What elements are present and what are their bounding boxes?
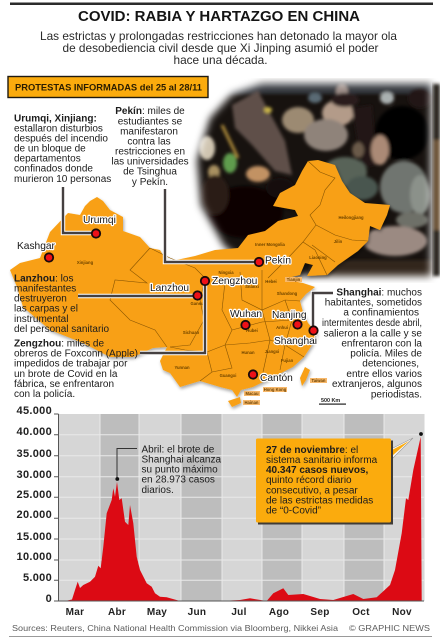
map: Hainan (228, 397, 241, 407)
intro text: hace una década. (174, 53, 268, 67)
text: Zengzhou: un brote de Covid en la (14, 369, 118, 380)
chart: y axis labels: 20.000 (17, 509, 52, 521)
text: Shanghai: policía. Miles de (350, 348, 422, 360)
chart: y axis labels: 5.000 (23, 572, 52, 584)
map: province borders (110, 161, 368, 381)
map of China (10, 160, 390, 407)
chart: month labels: Jun (188, 607, 206, 618)
intro text (40, 29, 397, 67)
text: Urumqi: murieron 10 personas (14, 174, 111, 185)
text: Shanghai: enfrentaron con la (341, 338, 422, 350)
map: province names: Hunan (241, 350, 255, 355)
text: Pekín: restricciones en (115, 146, 185, 158)
scale bar (319, 398, 346, 405)
photo right strip (433, 84, 440, 276)
sources line: Sources: Reuters, China National Health Commission via Bloomberg, Nikkei Asia (12, 623, 338, 633)
city markers and names: Lanzhou (150, 283, 189, 294)
chart: month labels: Oct (352, 607, 370, 618)
map: province names: Jilin (334, 239, 343, 244)
text: Shanghai: intermitentes desde abril, (322, 318, 422, 329)
text: Pekín: Pekín: miles de (115, 106, 185, 117)
text: Shanghai: extranjeros, algunos (332, 379, 422, 390)
map: province names: Ningxia (218, 270, 234, 275)
map: province names: Xinjiang (77, 260, 94, 265)
city markers and names: Shanghai (274, 336, 317, 347)
intro text: de desobediencia civil desde que Xi Jinping asumió el poder (62, 41, 379, 55)
chart: y axis labels: 15.000 (17, 531, 52, 543)
city markers and names: Pekín (265, 256, 291, 266)
chart: y axis labels: 30.000 (17, 469, 52, 481)
callout: 27 November: 27 de noviembre: el (266, 445, 358, 456)
map: province names: Heilongjiang (338, 215, 364, 220)
credit: © GRAPHIC NEWS (349, 623, 430, 633)
chart: baseline and axis (54, 414, 424, 601)
text: Shanghai: a confinamientos (343, 308, 419, 318)
chart: daily cases (17, 405, 424, 618)
text: Pekín: manifestaron (120, 126, 178, 138)
text: Lanzhou: instrumental (14, 314, 68, 325)
map: province names: Yunnan (174, 365, 190, 370)
intro text: Las estrictas y prolongadas restricciones han detonado la mayor ola (40, 29, 397, 43)
dot: November peak (419, 432, 423, 436)
map: province names: Hebei (265, 279, 277, 284)
chart: month labels: Abr (108, 607, 126, 618)
map: province names (77, 215, 364, 378)
chart: month labels: Sep (310, 607, 330, 618)
map: province names: Shandong (277, 291, 298, 296)
text: Pekín (111, 106, 189, 188)
text: Zengzhou: con la policía. (14, 389, 75, 400)
label tags: Tianjin, Taiwan, Macau, Hong Kong, Hainan: Hong Kong (264, 387, 287, 392)
annotation: April peak (115, 444, 221, 496)
text: Urumqi: estallaron disturbios (14, 124, 103, 134)
chart: month labels: Jul (231, 607, 247, 618)
text: Lanzhou: del personal sanitario (14, 324, 109, 335)
chart: y axis labels: 35.000 (17, 448, 52, 460)
text: Zengzhou: obreros de Foxconn (Apple) (14, 348, 138, 360)
text: Zengzhou (14, 338, 138, 400)
annotation: April peak: Abril: el brote de (142, 444, 215, 456)
text: Pekín: de Tsinghua (123, 166, 177, 178)
city markers and names (17, 215, 318, 384)
label tags: Tianjin, Taiwan, Macau, Hong Kong, Hainan: Taiwan (312, 378, 326, 383)
text: Shanghai (322, 288, 422, 400)
text: Shanghai: entre ellos varios (346, 369, 422, 380)
callout: 27 November: 40.347 casos nuevos, (266, 465, 369, 476)
scale bar: 500 Km (321, 398, 340, 404)
text: Urumqi: confinados donde (14, 164, 93, 174)
top rule (10, 2, 433, 5)
city markers and names: Zengzhou (212, 276, 257, 287)
chart: month bands (58, 414, 424, 601)
text: Zengzhou: impedidos de trabajar por (14, 358, 128, 370)
text: Lanzhou: manifestantes (14, 284, 76, 294)
chart: y axis labels: 25.000 (17, 489, 52, 501)
map: Taiwan (300, 367, 310, 386)
text: Urumqi: Urumqi, Xinjiang: (14, 114, 97, 124)
chart: y axis labels: 45.000 (17, 405, 52, 417)
chart: y axis labels: 10.000 (17, 551, 52, 563)
text: Shanghai: periodistas. (371, 390, 422, 400)
annotation: April peak: su punto máximo (142, 464, 218, 476)
label tags: Tianjin, Taiwan, Macau, Hong Kong, Hainan: Tianjin (287, 277, 301, 282)
text: Pekín: estudiantes se (118, 116, 183, 128)
label tags: Tianjin, Taiwan, Macau, Hong Kong, Hainan: Macau (245, 391, 259, 396)
text: Shanghai: salieron a la calle y se (324, 328, 422, 340)
text: Pekín: contra las (127, 136, 171, 148)
text: Zengzhou: fábrica, se enfrentaron (14, 379, 114, 390)
heading: protests banner: PROTESTAS INFORMADAS del 25 al 28/11 (15, 82, 202, 92)
text: Shanghai: Shanghai: muchos (336, 288, 422, 298)
callout: 27 November: consecutivo, a pesar (266, 486, 358, 496)
label tags: Tianjin, Taiwan, Macau, Hong Kong, Hainan (243, 277, 327, 405)
callout: 27 November: de las estrictas medidas (266, 496, 373, 506)
chart: month labels: May (147, 607, 167, 618)
text: Shanghai: detenciones, (362, 358, 419, 370)
text: Urumqi: de un bloque de (14, 144, 86, 154)
city markers and names: Wuhan (230, 309, 262, 320)
city markers and names: Kashgar (17, 241, 56, 252)
bottom rule (9, 636, 432, 637)
annotation: April peak: en 28.973 casos (142, 474, 215, 486)
label tags: Tianjin, Taiwan, Macau, Hong Kong, Hainan: Hainan (245, 400, 259, 405)
text: Urumqi: después del incendio (14, 134, 108, 144)
chart: red area (65, 437, 422, 601)
annotation: April peak: Shanghai alcanza (142, 454, 221, 466)
callout: 27 November (256, 438, 413, 524)
chart: month labels: Ago (269, 607, 289, 618)
map: province names: Guangxi (220, 373, 236, 378)
chart: y axis labels: 0 (46, 593, 52, 605)
chart: y axis labels (17, 405, 52, 605)
photo: crowd of protesters (190, 78, 440, 283)
chart: y axis labels: 40.000 (17, 426, 52, 438)
map: province names: Anhui (276, 325, 288, 330)
text: Lanzhou: destruyeron (14, 294, 67, 304)
heading: protests banner (8, 76, 208, 98)
map: province names: Shanxi (245, 284, 259, 289)
title: COVID: RABIA Y HARTAZGO EN CHINA (78, 9, 361, 25)
connector lines (63, 187, 333, 353)
map: province names: Hubei (246, 328, 258, 333)
city markers and names: Nanjing (272, 310, 307, 321)
text: Pekín: y Pekín. (132, 177, 168, 188)
text: Zengzhou: Zengzhou: miles de (14, 338, 104, 350)
map: main landmass (10, 160, 390, 397)
text: Lanzhou: las carpas y el (14, 304, 78, 314)
callout: 27 November: quinto récord diario (266, 475, 352, 486)
city markers and names: Cantón (260, 373, 293, 384)
text: Lanzhou: Lanzhou: los (14, 274, 73, 284)
map: province names: Liaoning (309, 255, 327, 260)
chart: month labels (66, 607, 412, 618)
city markers and names: Urumqi (83, 215, 116, 226)
map: province names: Inner Mongolia (255, 242, 286, 247)
map: province names: Fujian (281, 358, 294, 363)
callout: 27 November: de “0-Covid” (266, 506, 321, 516)
text: Lanzhou (14, 274, 109, 335)
map: province names: Sichuan (183, 330, 200, 335)
text: Urumqi (14, 114, 111, 185)
text: Pekín: las universidades (111, 156, 189, 168)
chart: month labels: Nov (392, 607, 412, 618)
map: province names: Jiangxi (265, 349, 279, 354)
text: Shanghai: habitantes, sometidos (325, 298, 422, 308)
text: Urumqi: departamentos (14, 154, 81, 164)
callout: 27 November: sistema sanitario informa (266, 455, 378, 466)
annotation: April peak: diarios. (142, 485, 174, 496)
map: province names: Gansu (190, 301, 204, 306)
chart: month labels: Mar (66, 607, 84, 618)
